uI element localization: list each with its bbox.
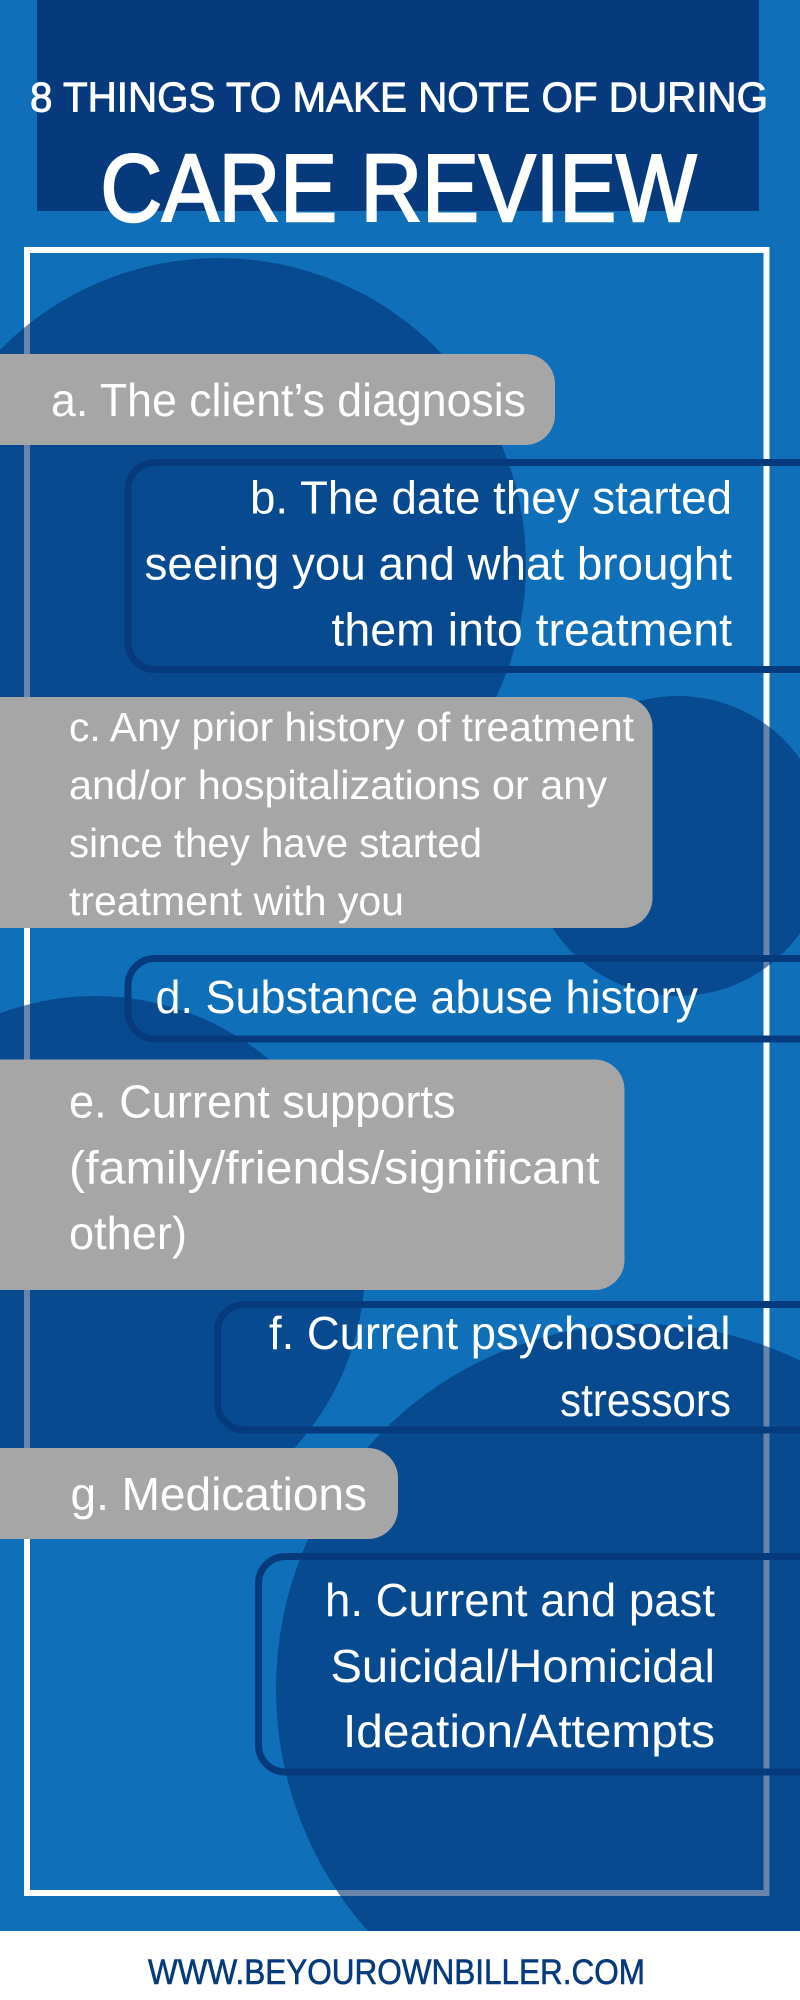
outline b	[128, 462, 800, 670]
white frame	[27, 250, 766, 1893]
pill c	[0, 697, 652, 928]
text h: Ideation/Attempts	[343, 1705, 715, 1757]
text c	[69, 704, 635, 924]
text e: e. Current supports	[69, 1076, 456, 1128]
text b	[144, 472, 732, 656]
footer url: WWW.BEYOUROWNBILLER.COM	[148, 1953, 645, 1992]
item b	[128, 462, 800, 670]
text f: f. Current psychosocial	[269, 1307, 730, 1359]
pill a	[0, 354, 555, 445]
text b: b. The date they started	[250, 472, 732, 524]
item c	[0, 697, 652, 928]
footer band	[0, 1931, 800, 2000]
item g	[0, 1448, 398, 1539]
text c: c. Any prior history of treatment	[69, 704, 635, 750]
pill e	[0, 1060, 624, 1290]
text c: since they have started	[69, 820, 482, 866]
text h: Suicidal/Homicidal	[330, 1640, 715, 1692]
item d	[128, 958, 800, 1039]
text e: other)	[69, 1207, 187, 1259]
text f: stressors	[560, 1374, 731, 1426]
outline d	[128, 958, 800, 1039]
text f	[269, 1307, 731, 1426]
outline f	[218, 1304, 800, 1430]
text h: h. Current and past	[325, 1574, 715, 1626]
header panel	[37, 0, 759, 211]
text e: (family/friends/significant	[69, 1142, 600, 1194]
pill g	[0, 1448, 398, 1539]
item f	[218, 1304, 800, 1430]
text c: treatment with you	[69, 878, 404, 924]
item e	[0, 1060, 624, 1290]
text a: a. The client’s diagnosis	[51, 374, 526, 426]
text d: d. Substance abuse history	[156, 971, 698, 1023]
text b: them into treatment	[332, 604, 732, 656]
item h	[258, 1556, 800, 1772]
title line 2: CARE REVIEW	[100, 135, 697, 242]
text h	[325, 1574, 715, 1757]
outline h	[258, 1556, 800, 1772]
item a	[0, 354, 555, 445]
title line 1: 8 THINGS TO MAKE NOTE OF DURING	[30, 74, 768, 120]
text g: g. Medications	[70, 1468, 367, 1520]
title	[30, 74, 768, 242]
text b: seeing you and what brought	[144, 538, 732, 590]
text e	[69, 1076, 600, 1259]
text c: and/or hospitalizations or any	[69, 762, 607, 808]
